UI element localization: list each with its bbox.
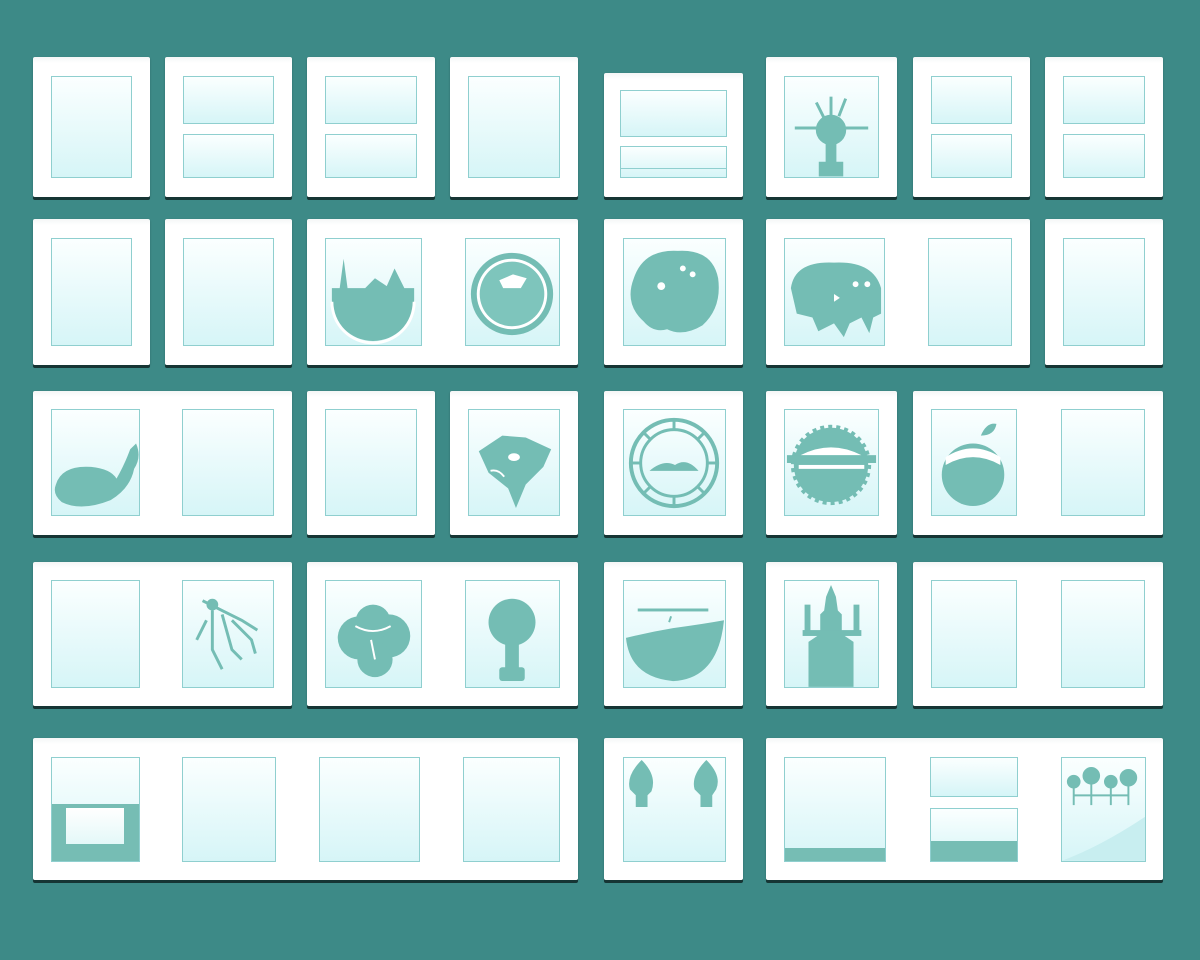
panel bottom	[325, 134, 417, 178]
panel	[1061, 409, 1145, 516]
panel bottom	[183, 134, 274, 178]
card r4c1	[33, 562, 292, 706]
panel diamond blob	[468, 409, 560, 516]
panel	[51, 580, 140, 688]
card r2c5	[766, 219, 1030, 365]
card r2c1	[33, 219, 150, 365]
panel	[51, 76, 132, 178]
panel fruit	[931, 409, 1017, 516]
panel squid	[182, 580, 274, 688]
panel	[623, 757, 726, 862]
panel flower blob	[325, 580, 422, 688]
panel	[1061, 580, 1145, 688]
card r3c6	[913, 391, 1163, 535]
card r1c5	[604, 73, 743, 197]
panel ring	[465, 238, 560, 346]
panel head	[465, 580, 560, 688]
row 4	[32, 562, 1164, 709]
panel with base strip	[784, 757, 886, 862]
panel	[623, 580, 726, 688]
panel top	[620, 90, 727, 137]
panel trees	[1061, 757, 1146, 862]
card r3c4	[604, 391, 743, 535]
card r1c3	[307, 57, 435, 197]
row 1	[32, 57, 1164, 200]
panel bottom	[931, 134, 1012, 178]
panel with sun icon	[784, 76, 879, 178]
card r3c2	[307, 391, 435, 535]
panel top	[325, 76, 417, 124]
panel	[183, 238, 274, 346]
panel top	[1063, 76, 1145, 124]
panel bottom	[1063, 134, 1145, 178]
row 5	[32, 738, 1164, 883]
panel castle	[325, 238, 422, 346]
card r5c3	[766, 738, 1163, 880]
card r1c2	[165, 57, 292, 197]
card r4c4 tower	[766, 562, 897, 706]
panel	[182, 409, 274, 516]
card r1c7	[913, 57, 1030, 197]
card r2c2	[165, 219, 292, 365]
card r3c3	[450, 391, 578, 535]
row 2	[32, 219, 1164, 368]
panel bottom	[620, 146, 727, 178]
panel bottom	[930, 808, 1018, 862]
card r4c5	[913, 562, 1163, 706]
panel top	[931, 76, 1012, 124]
panel	[463, 757, 560, 862]
panel top	[930, 757, 1018, 797]
card r1c4	[450, 57, 578, 197]
panel top	[183, 76, 274, 124]
card r2c6	[1045, 219, 1163, 365]
card r4c2	[307, 562, 578, 706]
panel	[784, 580, 879, 688]
row 3	[32, 391, 1164, 538]
card r1c8	[1045, 57, 1163, 197]
panel	[784, 409, 879, 516]
card r1c6 sun	[766, 57, 897, 197]
panel	[931, 580, 1017, 688]
panel elephant	[784, 238, 885, 346]
card r4c3 bowl	[604, 562, 743, 706]
panel wheel	[623, 409, 726, 516]
panel	[51, 238, 132, 346]
panel	[623, 238, 726, 346]
card r1c1	[33, 57, 150, 197]
panel	[319, 757, 420, 862]
panel	[468, 76, 560, 178]
card r5c1	[33, 738, 578, 880]
panel	[1063, 238, 1145, 346]
panel whale	[51, 409, 140, 516]
card r2c4 blob	[604, 219, 743, 365]
card r5c2 pins	[604, 738, 743, 880]
card r2c3	[307, 219, 578, 365]
card r3c1	[33, 391, 292, 535]
panel	[928, 238, 1012, 346]
panel with filled base	[51, 757, 140, 862]
panel	[182, 757, 276, 862]
panel	[325, 409, 417, 516]
card r3c5 gear	[766, 391, 897, 535]
